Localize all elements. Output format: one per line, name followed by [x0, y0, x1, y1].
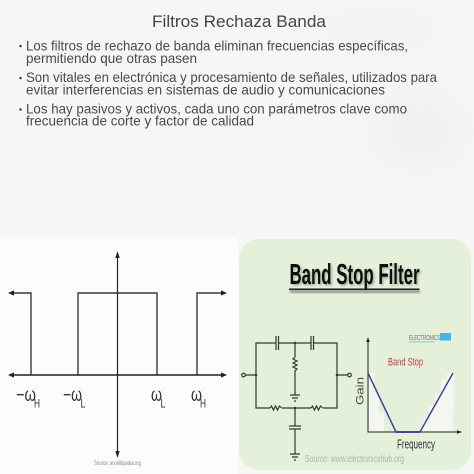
horizontal axis: [13, 374, 222, 376]
title: Filtros Rechaza Banda: [152, 12, 327, 31]
bullet 1: permitiendo que otras pasen: [26, 50, 197, 66]
circuit schematic: [242, 336, 351, 460]
frequency labels: L: [80, 396, 86, 410]
source note: Source: en.wikipedia.org: [94, 460, 141, 467]
logo: ELECTRONICS: [409, 333, 440, 342]
panel heading: [289, 259, 421, 293]
frequency labels: [16, 385, 206, 410]
panel: ideal band-stop response chart: [0, 237, 238, 474]
circuit junctions: [255, 342, 338, 409]
gain-frequency graph: Frequency: [397, 436, 435, 452]
bullet 3: frecuencia de corte y factor de calidad: [26, 113, 254, 129]
frequency labels: H: [200, 396, 206, 410]
source note: Source: www.electronicshub.org: [305, 454, 404, 465]
bullet 2: evitar interferencias en sistemas de audio y comunicaciones: [26, 82, 385, 98]
frequency labels: L: [160, 396, 166, 410]
graph axes: [368, 340, 460, 432]
frequency labels: −ω: [16, 385, 36, 406]
gain-frequency graph: Band Stop: [388, 356, 423, 368]
bullet 3: Los hay pasivos y activos, cada uno con parámetros clave como: [26, 100, 407, 116]
bullet 2: Son vitales en electrónica y procesamiento de señales, utilizados para: [26, 69, 437, 85]
bullet 3: [19, 100, 407, 129]
vertical axis: [116, 256, 118, 453]
arrowheads: [8, 251, 227, 458]
bullet 2: [19, 69, 437, 98]
bullet list: [19, 38, 437, 129]
frequency labels: ω: [191, 385, 202, 406]
gain-frequency graph: [354, 333, 462, 452]
graph labels: Gain: [354, 377, 366, 405]
band-stop response curve: [13, 293, 222, 375]
white graph backing: [369, 373, 384, 432]
panel: band stop filter diagram: [239, 239, 471, 470]
frequency labels: ω: [151, 385, 162, 406]
bullet 1: [19, 38, 408, 66]
frequency labels: H: [34, 396, 40, 410]
band stop curve: [368, 373, 453, 432]
bullet 1: Los filtros de rechazo de banda eliminan frecuencias específicas,: [26, 38, 408, 54]
frequency labels: −ω: [63, 385, 82, 406]
